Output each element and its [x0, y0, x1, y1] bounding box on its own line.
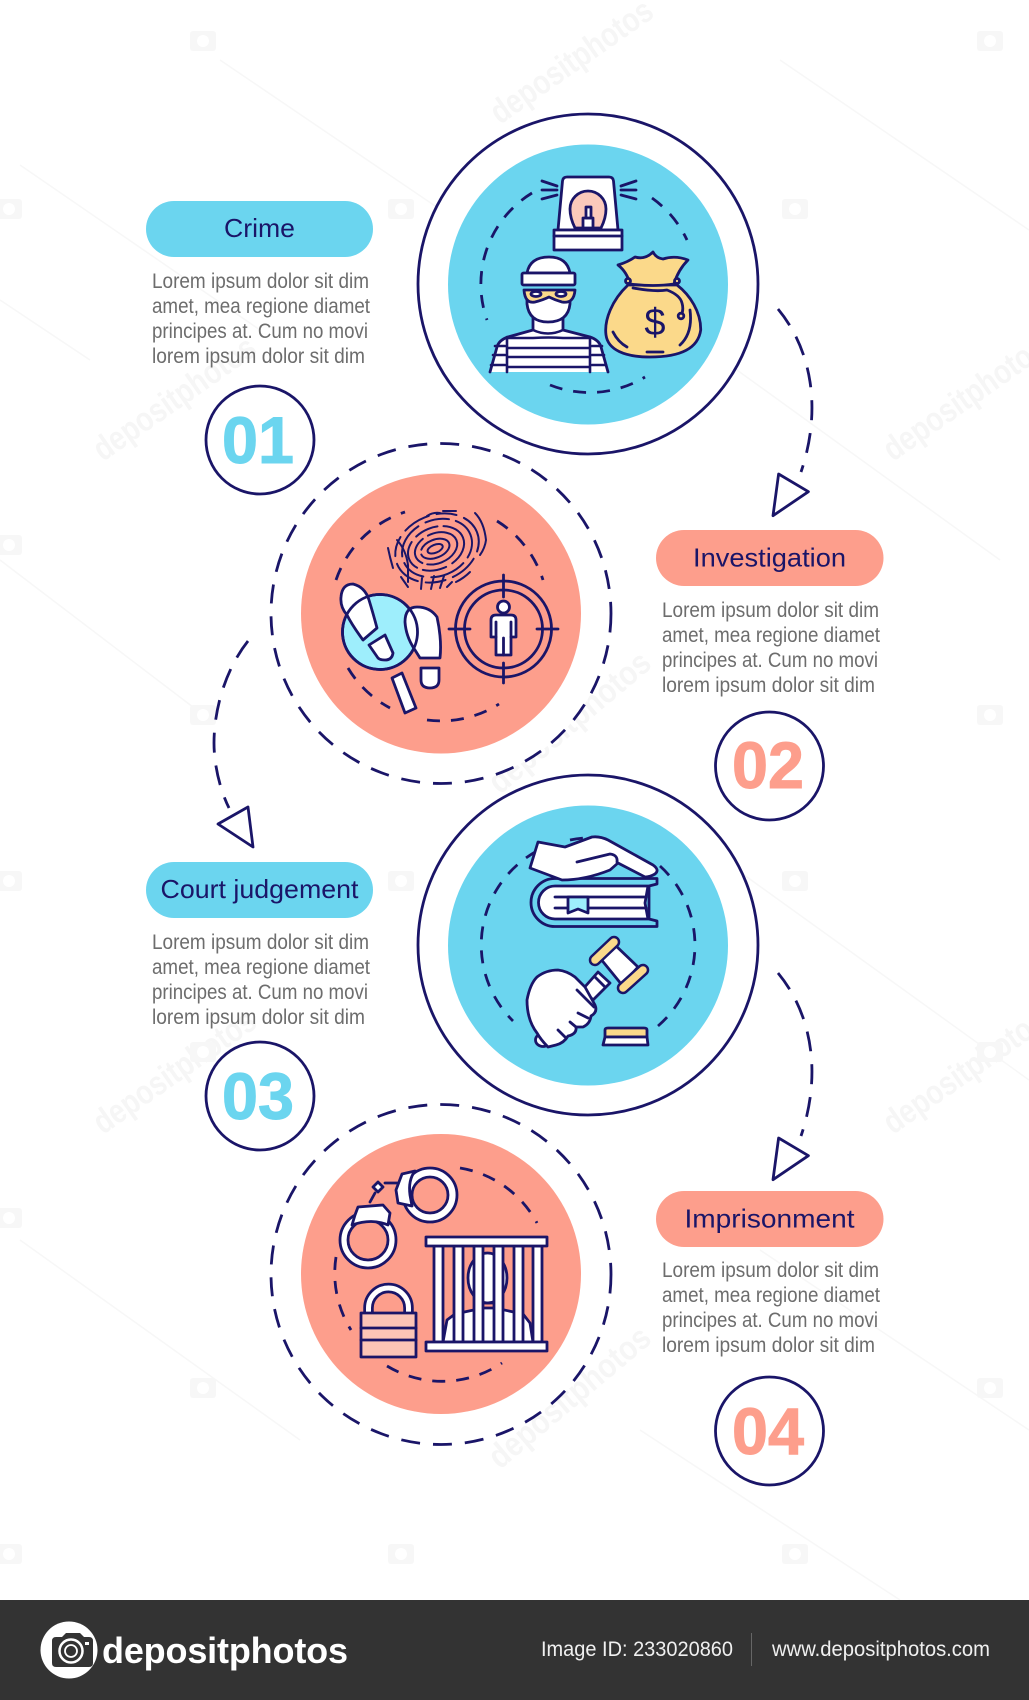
number badge 01: 01 [222, 403, 294, 477]
panel: step 3 court judgement [146, 775, 758, 1150]
text block: imprisonment description: lorem ipsum dolor sit dim [662, 1334, 875, 1357]
text block: investigation description: lorem ipsum dolor sit dim [662, 674, 875, 697]
icon: hand on book [530, 837, 657, 926]
text block: crime description: lorem ipsum dolor sit dim [152, 345, 365, 368]
text block: investigation description: Lorem ipsum dolor sit dim [662, 599, 879, 622]
number badge 04 [716, 1377, 824, 1485]
pill heading: Imprisonment: Imprisonment [684, 1204, 855, 1234]
logo wordmark: depositphotos [102, 1630, 348, 1671]
text block: investigation description [662, 599, 880, 697]
text block: imprisonment description: Lorem ipsum dolor sit dim [662, 1259, 879, 1282]
pill heading: Imprisonment [656, 1191, 884, 1247]
pill heading: Court judgement [146, 862, 373, 918]
number badge 01 [206, 386, 314, 494]
text block: imprisonment description [662, 1259, 880, 1357]
number badge 02: 02 [732, 728, 804, 802]
text block: imprisonment description: principes at. Cum no movi [662, 1309, 878, 1332]
icon: target with person [449, 575, 558, 683]
icon: magnifier with footprints [341, 584, 441, 713]
pill heading: Crime: Crime [224, 213, 295, 243]
watermark text: depositphotos [481, 1318, 658, 1476]
text block: court description: Lorem ipsum dolor sit dim [152, 931, 369, 954]
number badge 03: 03 [222, 1059, 294, 1133]
icon: fingerprint [385, 501, 489, 595]
icon: gavel in hand [527, 942, 643, 1047]
text block: court description: lorem ipsum dolor sit dim [152, 1006, 365, 1029]
icon: padlock [361, 1288, 416, 1357]
pill heading: Investigation [656, 530, 884, 586]
circle icon: crime [418, 114, 758, 454]
icon: gavel block [603, 1028, 648, 1045]
text block: crime description: amet, mea regione diamet [152, 295, 370, 318]
watermark text [86, 0, 1029, 1476]
watermark text: depositphotos [86, 328, 263, 469]
image id: Image ID: 233020860 [541, 1638, 733, 1661]
pill heading: Investigation: Investigation [693, 542, 846, 572]
pill heading: Court judgement: Court judgement [160, 874, 359, 904]
icon: money bag [606, 252, 701, 357]
number badge 04: 04 [732, 1394, 804, 1468]
panel: step 2 investigation [271, 444, 884, 820]
circle icon: court [418, 775, 758, 1115]
text block: crime description [152, 270, 370, 368]
circle icon: imprisonment [271, 1104, 611, 1444]
icon: thief [490, 257, 608, 372]
text block: crime description: principes at. Cum no movi [152, 320, 368, 343]
text block: investigation description: principes at. Cum no movi [662, 649, 878, 672]
icon: money bag: $ [644, 302, 666, 344]
panel: step 4 imprisonment [271, 1104, 884, 1485]
circle icon: investigation [271, 444, 611, 784]
icon: prisoner behind bars [426, 1237, 547, 1351]
number badge 02 [716, 712, 824, 820]
arrow: step 2 to step 3 [214, 641, 253, 847]
text block: court description: amet, mea regione diamet [152, 956, 370, 979]
text block: investigation description: amet, mea regione diamet [662, 624, 880, 647]
number badge 03 [206, 1042, 314, 1150]
watermark text: depositphotos [86, 1001, 263, 1142]
icon: handcuffs [340, 1168, 457, 1268]
arrow: step 1 to step 2 [773, 309, 812, 516]
panel: step 1 crime [146, 114, 758, 494]
logo: camera badge [40, 1622, 98, 1678]
text block: court description [152, 931, 370, 1029]
text block: court description: principes at. Cum no movi [152, 981, 368, 1004]
pill heading: Crime [146, 201, 373, 257]
footer bar [0, 1600, 1029, 1700]
text block: imprisonment description: amet, mea regione diamet [662, 1284, 880, 1307]
text block: crime description: Lorem ipsum dolor sit dim [152, 270, 369, 293]
icon: siren [542, 177, 636, 250]
website url: www.depositphotos.com [771, 1638, 990, 1661]
watermark text: depositphotos [481, 643, 658, 801]
arrow: step 3 to step 4 [773, 973, 812, 1180]
